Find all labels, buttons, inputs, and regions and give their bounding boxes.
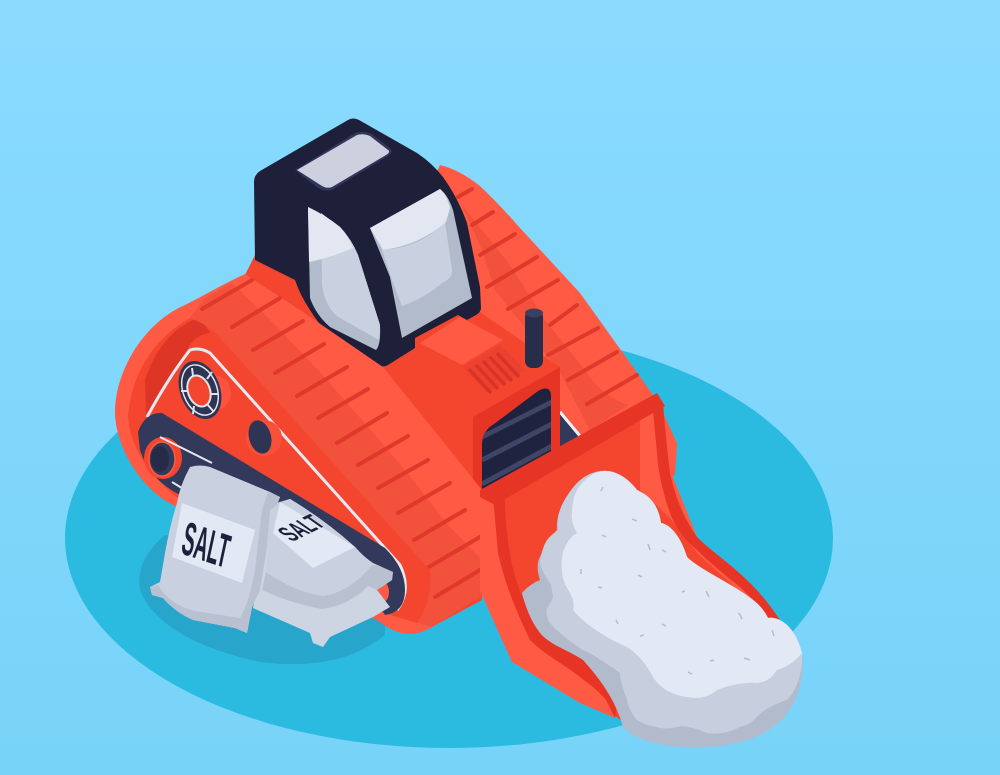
far track bbox=[400, 165, 677, 500]
blade right band bbox=[652, 400, 780, 620]
bag shadow bbox=[139, 530, 385, 664]
pile middle layer bbox=[540, 471, 802, 734]
front grille bbox=[473, 367, 560, 495]
blade interior bbox=[495, 405, 778, 720]
vent bbox=[463, 345, 525, 393]
dark belt bbox=[138, 413, 405, 615]
blade right inner light bbox=[640, 408, 768, 612]
right window bbox=[370, 189, 472, 338]
tractor body bbox=[240, 255, 560, 628]
blade left band bbox=[493, 497, 617, 718]
roof window bbox=[295, 132, 392, 191]
tread shade bbox=[190, 283, 482, 627]
back bag text: SALT bbox=[270, 510, 332, 546]
hood highlight bbox=[420, 317, 503, 365]
blade top bar bbox=[480, 393, 665, 505]
pile outer shadow bbox=[522, 471, 802, 747]
white belt bbox=[147, 349, 405, 610]
salt pile bbox=[522, 471, 802, 747]
back bag label bbox=[273, 502, 355, 568]
back salt bag bbox=[253, 499, 393, 647]
pile top layer bbox=[562, 471, 802, 698]
wheel rim bbox=[171, 355, 231, 425]
front salt bag bbox=[150, 466, 280, 633]
tread lines bbox=[202, 280, 480, 597]
cab bbox=[254, 118, 481, 366]
hole bbox=[245, 418, 282, 456]
small front wheel bbox=[377, 582, 389, 602]
panel shade bbox=[145, 320, 210, 415]
exhaust post bbox=[525, 308, 543, 368]
side panel bbox=[128, 318, 430, 623]
ground ellipse bbox=[65, 328, 833, 748]
blade left side bbox=[480, 495, 615, 718]
rear wheel bbox=[144, 437, 212, 490]
front bag text: SALT bbox=[178, 512, 234, 578]
front bag label bbox=[172, 503, 255, 583]
blade bbox=[480, 393, 780, 720]
near track bbox=[115, 274, 482, 634]
left window bbox=[308, 207, 380, 350]
pile flecks bbox=[581, 487, 774, 674]
